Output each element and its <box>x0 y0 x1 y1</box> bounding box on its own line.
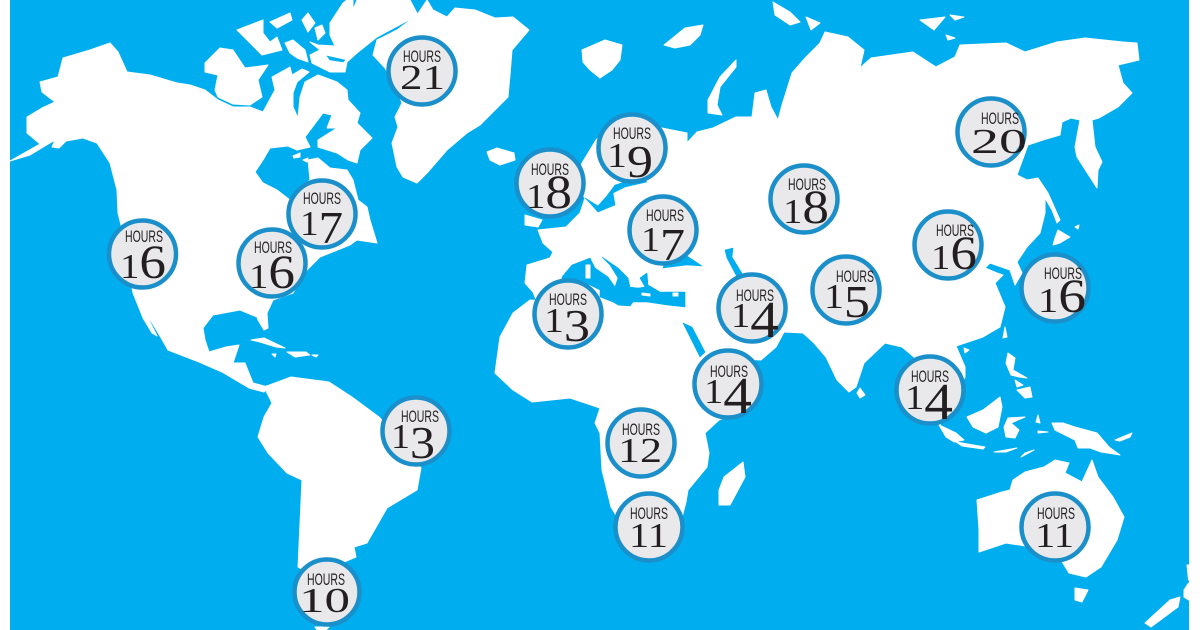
marker: 17 hours, eastern Europe: 7 <box>660 219 685 270</box>
marker: 13 hours, North Africa: 3 <box>564 300 590 351</box>
marker: 14 hours, East Africa: HOURS <box>710 362 748 381</box>
marker: 16 hours, eastern USA <box>238 230 306 299</box>
marker: 16 hours, Japan: 16 <box>1038 270 1086 323</box>
marker: 17 hours, eastern Canada: HOURS <box>303 189 341 208</box>
marker: 21 hours, Greenland: HOURS <box>403 47 441 66</box>
marker: 14 hours, Southeast Asia: HOURS <box>911 367 949 386</box>
Svalbard and arctic islands <box>582 2 964 115</box>
marker: 14 hours, Middle East <box>718 274 786 349</box>
marker: 13 hours, Brazil: 1 <box>391 417 410 456</box>
marker: 12 hours, central Africa: 12 <box>618 431 662 470</box>
marker: 15 hours, central Asia: HOURS <box>836 267 874 286</box>
New Zealand <box>1145 565 1188 627</box>
marker: 14 hours, East Africa: 4 <box>723 368 752 425</box>
marker: 10 hours, Patagonia: 10 <box>299 581 350 620</box>
marker: 13 hours, North Africa: HOURS <box>549 290 587 309</box>
marker: 11 hours, Australia: HOURS <box>1037 504 1075 523</box>
marker: 14 hours, East Africa <box>694 350 762 425</box>
New Guinea <box>1052 423 1132 455</box>
marker: 17 hours, eastern Canada: 1 <box>300 204 319 243</box>
marker: 13 hours, Brazil: 3 <box>410 417 435 468</box>
marker: 16 hours, Japan <box>1022 254 1088 323</box>
Lancaster Sound sliver <box>327 56 345 62</box>
marker: 19 hours, Scandinavia: 1 <box>607 136 627 175</box>
marker: 15 hours, central Asia: 5 <box>844 276 870 327</box>
marker: 18 hours, Russia: HOURS <box>788 175 826 194</box>
Caribbean islands <box>251 338 318 357</box>
marker: 19 hours, Scandinavia <box>598 114 666 187</box>
marker: 11 hours, southern Africa: 11 <box>629 516 668 555</box>
marker: 11 hours, southern Africa: HOURS <box>630 504 668 523</box>
marker: 13 hours, Brazil: HOURS <box>401 407 439 426</box>
marker: 14 hours, Middle East: 4 <box>750 292 779 349</box>
Great Britain south <box>525 215 542 227</box>
marker: 14 hours, Middle East: 1 <box>731 296 750 335</box>
marker: 18 hours, Britain: 18 <box>526 166 572 219</box>
marker: 16 hours, China <box>914 212 982 280</box>
Mediterranean Sea <box>562 257 685 310</box>
Arctic Canada islands <box>205 0 418 105</box>
marker: 14 hours, Southeast Asia <box>896 356 964 431</box>
marker: 11 hours, Australia <box>1022 494 1088 560</box>
Black Sea <box>663 256 702 268</box>
marker: 20 hours, eastern Russia: 2 0 <box>971 122 1027 161</box>
Mediterranean islands <box>586 265 678 296</box>
Australia <box>977 460 1124 602</box>
marker: 18 hours, Britain: HOURS <box>531 160 569 179</box>
marker: 11 hours, Australia: 11 <box>1035 516 1074 555</box>
marker: 18 hours, Russia <box>770 166 838 234</box>
marker: 14 hours, Southeast Asia: 1 <box>905 378 924 417</box>
marker: 16 hours, China: HOURS <box>936 221 974 240</box>
Baltic Sea <box>585 177 647 212</box>
Red Sea <box>683 323 705 357</box>
marker: 18 hours, Britain <box>516 150 584 219</box>
marker: 17 hours, eastern Canada: 7 <box>319 202 343 253</box>
marker: 15 hours, central Asia <box>812 256 880 327</box>
marker: 17 hours, eastern Europe <box>630 196 696 270</box>
marker: 16 hours, Japan: HOURS <box>1044 264 1082 283</box>
marker: 16 hours, western North America <box>109 220 176 289</box>
marker: 20 hours, eastern Russia <box>958 98 1027 166</box>
marker: 19 hours, Scandinavia: 9 <box>627 136 653 187</box>
marker: 21 hours, Greenland: 21 <box>400 58 445 97</box>
marker: 16 hours, China: 16 <box>931 227 977 280</box>
marker: 21 hours, Greenland <box>388 38 456 104</box>
marker: 13 hours, North Africa <box>534 280 602 351</box>
marker: 13 hours, Brazil <box>382 398 450 468</box>
Japan <box>1053 225 1079 245</box>
marker: 12 hours, central Africa: HOURS <box>622 420 660 439</box>
marker: 19 hours, Scandinavia: HOURS <box>613 124 651 143</box>
Africa <box>495 300 760 545</box>
marker: 16 hours, eastern USA: 16 <box>249 246 295 299</box>
marker: 20 hours, eastern Russia: HOURS <box>981 109 1019 128</box>
marker: 14 hours, Middle East: HOURS <box>736 286 774 305</box>
marker: 12 hours, central Africa <box>608 410 674 476</box>
marker: 15 hours, central Asia: 1 <box>824 277 844 316</box>
South America <box>258 377 421 630</box>
Madagascar <box>719 462 745 505</box>
Caspian Sea <box>725 248 743 277</box>
marker: 10 hours, Patagonia <box>294 560 360 624</box>
marker: 10 hours, Patagonia: HOURS <box>307 570 345 589</box>
North America <box>10 43 377 392</box>
marker: 17 hours, eastern Canada <box>288 180 356 253</box>
marker: 11 hours, southern Africa <box>616 494 682 560</box>
marker: 17 hours, eastern Europe: 1 <box>641 220 660 259</box>
marker: 17 hours, eastern Europe: HOURS <box>646 206 684 225</box>
marker: 16 hours, eastern USA: HOURS <box>254 238 292 257</box>
marker: 18 hours, Russia: 18 <box>783 181 829 234</box>
Iceland <box>487 148 515 165</box>
Southeast Asia islands <box>857 327 1048 457</box>
Hudson Bay islands <box>293 153 308 162</box>
marker: 16 hours, western North America: HOURS <box>125 227 163 246</box>
marker: 14 hours, Southeast Asia: 4 <box>924 374 953 431</box>
marker: 16 hours, western North America: 16 <box>120 236 166 289</box>
marker: 14 hours, East Africa: 1 <box>704 372 723 411</box>
marker: 13 hours, North Africa: 1 <box>544 301 564 340</box>
Eurasia <box>525 32 1139 425</box>
Greenland <box>373 0 529 183</box>
